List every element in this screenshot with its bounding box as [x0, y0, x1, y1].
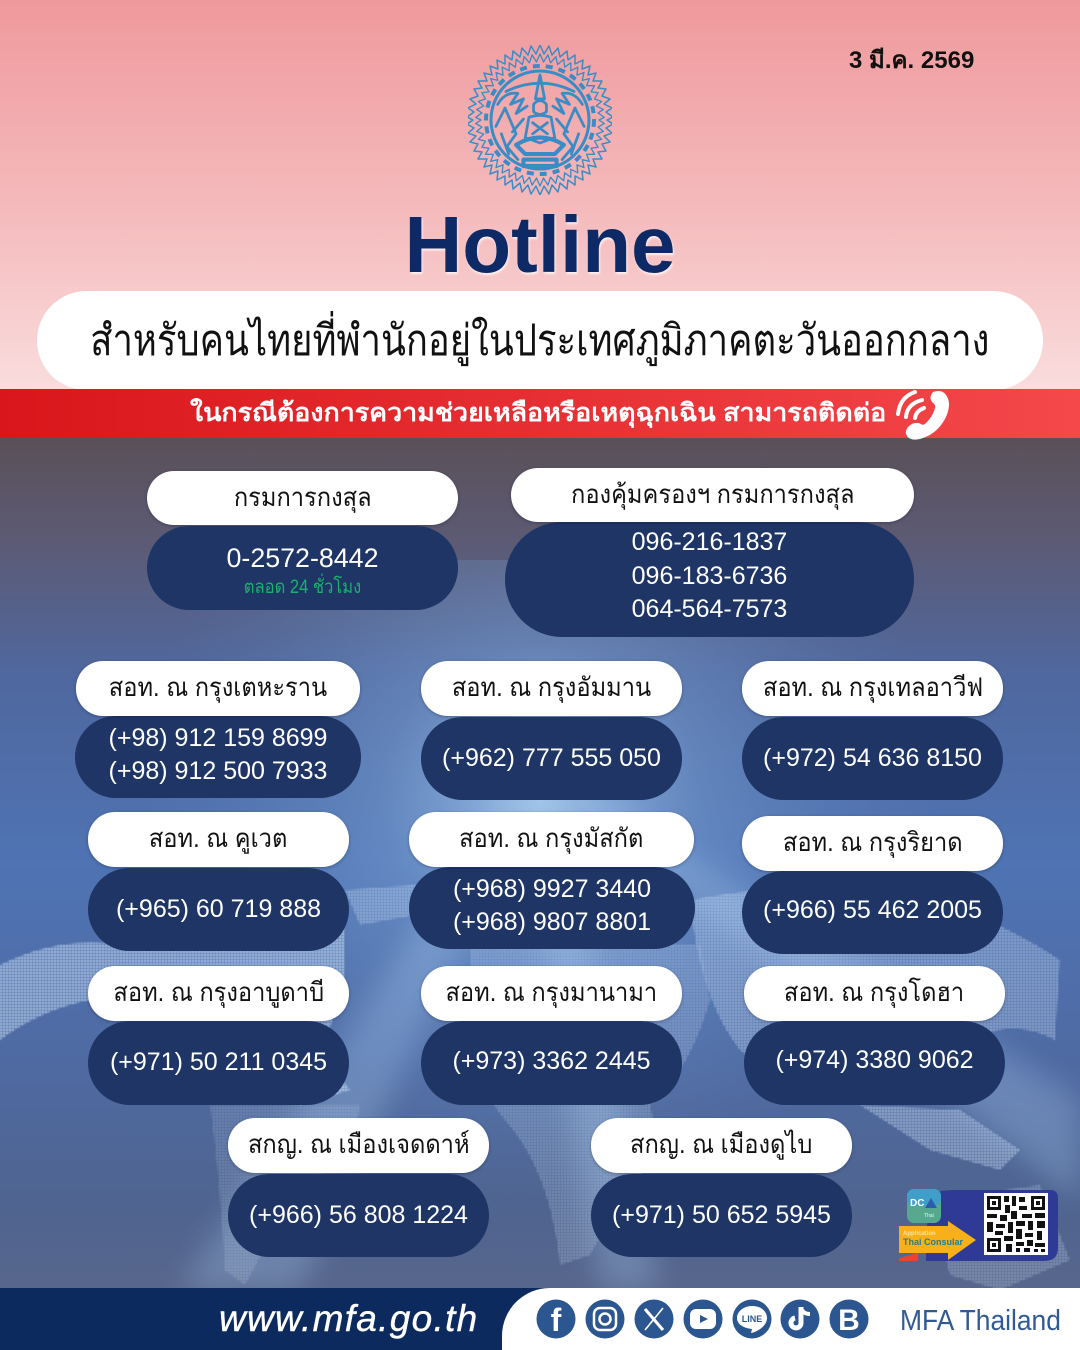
pill label	[88, 812, 349, 867]
phone number: (+962) 777 555 050	[442, 744, 661, 772]
icon: ministry seal	[468, 45, 612, 195]
white footer panel	[502, 1288, 1080, 1350]
pill label: สอท. ณ กรุงอาบูดาบี	[113, 977, 324, 1007]
icon: youtube	[690, 1309, 716, 1329]
icon: tiktok	[791, 1307, 801, 1328]
pill label: สกญ. ณ เมืองดูไบ	[630, 1129, 813, 1159]
phone number	[147, 526, 458, 610]
footer bar	[0, 1288, 1080, 1350]
website url: www.mfa.go.th	[219, 1298, 479, 1339]
pill label	[421, 661, 682, 716]
panel: riyadh	[740, 816, 1004, 954]
pill label	[228, 1118, 489, 1173]
phone number: (+966) 55 462 2005	[763, 896, 982, 924]
phone number: (+972) 54 636 8150	[763, 744, 982, 772]
app promo: thai consular with qr code: Thai Consular	[903, 1237, 964, 1247]
pill label: สอท. ณ กรุงโดฮา	[784, 977, 965, 1007]
phone number: (+971) 50 211 0345	[110, 1048, 327, 1076]
panel: abu dhabi	[86, 966, 978, 1105]
phone numbers	[75, 716, 361, 798]
app promo: thai consular with qr code: DC	[910, 1198, 924, 1209]
phone numbers: (+968) 9927 3440	[453, 874, 651, 902]
phone number: 0-2572-8442	[226, 542, 378, 572]
pill label: กรมการกงสุล	[234, 482, 371, 512]
app promo: thai consular with qr code: Thai	[924, 1213, 934, 1219]
panel: kuwait	[86, 812, 976, 953]
phone number: (+973) 3362 2445	[452, 1047, 651, 1075]
pill label: สอท. ณ กรุงมัสกัต	[459, 823, 644, 853]
app promo: thai consular with qr code	[899, 1189, 1058, 1261]
pill label: สอท. ณ คูเวต	[149, 823, 288, 853]
phone number	[88, 1021, 349, 1105]
icon: line	[737, 1306, 767, 1333]
phone numbers	[409, 867, 695, 949]
app promo: thai consular with qr code: Application	[903, 1231, 936, 1237]
panel: protection division	[505, 468, 914, 637]
panel: dubai	[590, 1118, 853, 1257]
phone number	[421, 1021, 682, 1105]
icon: phone with signal waves	[896, 390, 949, 440]
panel: amman	[420, 660, 684, 800]
red band	[0, 389, 1080, 438]
brand name: MFA Thailand	[900, 1305, 1061, 1337]
pill label	[147, 471, 458, 525]
pill label	[744, 966, 1005, 1021]
red band message: ในกรณีต้องการความช่วยเหลือหรือเหตุฉุกเฉิน สามารถติดต่อ	[190, 399, 886, 427]
icon: facebook: f	[551, 1302, 562, 1338]
subtitle banner	[37, 291, 1043, 390]
phone numbers: (+98) 912 500 7933	[109, 757, 327, 785]
pill label	[409, 812, 694, 867]
subtitle banner: สำหรับคนไทยที่พำนักอยู่ในประเทศภูมิภาคตะวันออกกลาง	[90, 316, 990, 364]
pill label: กองคุ้มครองฯ กรมการกงสุล	[571, 478, 854, 508]
panel: tel aviv	[740, 660, 1004, 800]
phone number: ตลอด 24 ชั่วโมง	[244, 576, 361, 598]
phone numbers: 096-216-1837	[632, 528, 787, 556]
panel: manama	[420, 966, 684, 1105]
pill label: สอท. ณ กรุงมานามา	[446, 977, 657, 1007]
icon: blockdit: B	[838, 1304, 860, 1337]
phone numbers	[505, 522, 914, 637]
phone number: (+965) 60 719 888	[116, 895, 321, 923]
pill label: สอท. ณ กรุงเตหะราน	[109, 672, 327, 702]
panel: tehran	[75, 660, 362, 798]
phone numbers: (+98) 912 159 8699	[109, 724, 327, 752]
title: Hotline	[404, 200, 676, 289]
pill label: สกญ. ณ เมืองเจดดาห์	[248, 1129, 469, 1159]
phone number	[591, 1174, 852, 1257]
phone number	[228, 1174, 489, 1257]
phone numbers: 064-564-7573	[632, 595, 787, 623]
phone number	[88, 868, 349, 951]
panel: department of consular affairs	[146, 471, 459, 610]
phone number	[744, 1021, 1005, 1105]
icon: x	[645, 1308, 663, 1330]
panel: jeddah	[226, 1118, 1057, 1261]
pill label	[511, 468, 914, 522]
pill label: สอท. ณ กรุงริยาด	[783, 827, 962, 857]
phone numbers: (+968) 9807 8801	[453, 908, 651, 936]
icon: line: LINE	[742, 1314, 762, 1324]
phone number	[742, 717, 1003, 800]
phone number: (+966) 56 808 1224	[249, 1201, 468, 1229]
social icons	[536, 1300, 868, 1338]
phone number	[742, 871, 1003, 954]
pill label	[421, 966, 682, 1021]
pill label	[88, 966, 349, 1021]
pill label: สอท. ณ กรุงอัมมาน	[452, 672, 651, 702]
icon: instagram	[594, 1308, 616, 1330]
phone number: (+974) 3380 9062	[775, 1046, 974, 1074]
panel: muscat	[408, 811, 696, 949]
pill label	[76, 661, 360, 716]
pill label	[742, 816, 1003, 871]
phone number: (+971) 50 652 5945	[612, 1201, 831, 1229]
phone number	[421, 717, 682, 800]
pill label	[742, 661, 1003, 716]
phone numbers: 096-183-6736	[632, 562, 787, 590]
date: 3 มี.ค. 2569	[849, 47, 974, 74]
panel: doha	[742, 966, 1006, 1105]
pill label: สอท. ณ กรุงเทลอาวีฟ	[762, 672, 983, 702]
pill label	[591, 1118, 852, 1173]
